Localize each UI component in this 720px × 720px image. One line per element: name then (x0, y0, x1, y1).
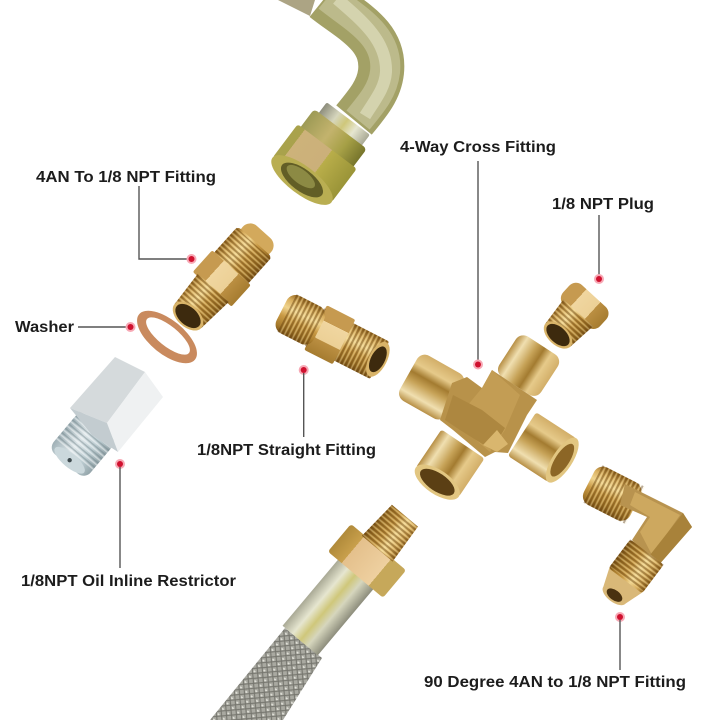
callout: 1/8NPT Straight Fitting (197, 365, 376, 459)
silver oil inline restrictor (47, 357, 163, 481)
callout: 1/8NPT Oil Inline Restrictor (21, 459, 236, 590)
callout: Washer (15, 319, 136, 336)
4-way brass cross fitting (396, 332, 585, 507)
lower braided hose with brass end (210, 493, 433, 720)
callout: Washer: Washer (15, 319, 74, 336)
callout: 1/8 NPT Plug (552, 196, 654, 284)
callout: 90 Degree 4AN to 1/8 NPT Fitting: 90 Degree 4AN to 1/8 NPT Fitting (424, 674, 686, 691)
callout: 4-Way Cross Fitting: 4-Way Cross Fitting (400, 139, 556, 156)
top braided hose with nut (264, 0, 386, 213)
straight brass fitting (270, 288, 397, 386)
callout: 4-Way Cross Fitting (400, 139, 556, 370)
4AN to 1/8 NPT brass fitting (161, 215, 283, 342)
callout: 1/8 NPT Plug: 1/8 NPT Plug (552, 196, 654, 213)
90 degree elbow brass fitting (579, 463, 692, 613)
brass plug (533, 279, 612, 359)
callout: 1/8NPT Straight Fitting: 1/8NPT Straight Fitting (197, 442, 376, 459)
copper washer (128, 301, 206, 373)
callout: 1/8NPT Oil Inline Restrictor: 1/8NPT Oil Inline Restrictor (21, 573, 236, 590)
callout: 90 Degree 4AN to 1/8 NPT Fitting (424, 612, 686, 691)
callout: 4AN To 1/8 NPT Fitting (36, 169, 216, 264)
callout: 4AN To 1/8 NPT Fitting: 4AN To 1/8 NPT Fitting (36, 169, 216, 186)
